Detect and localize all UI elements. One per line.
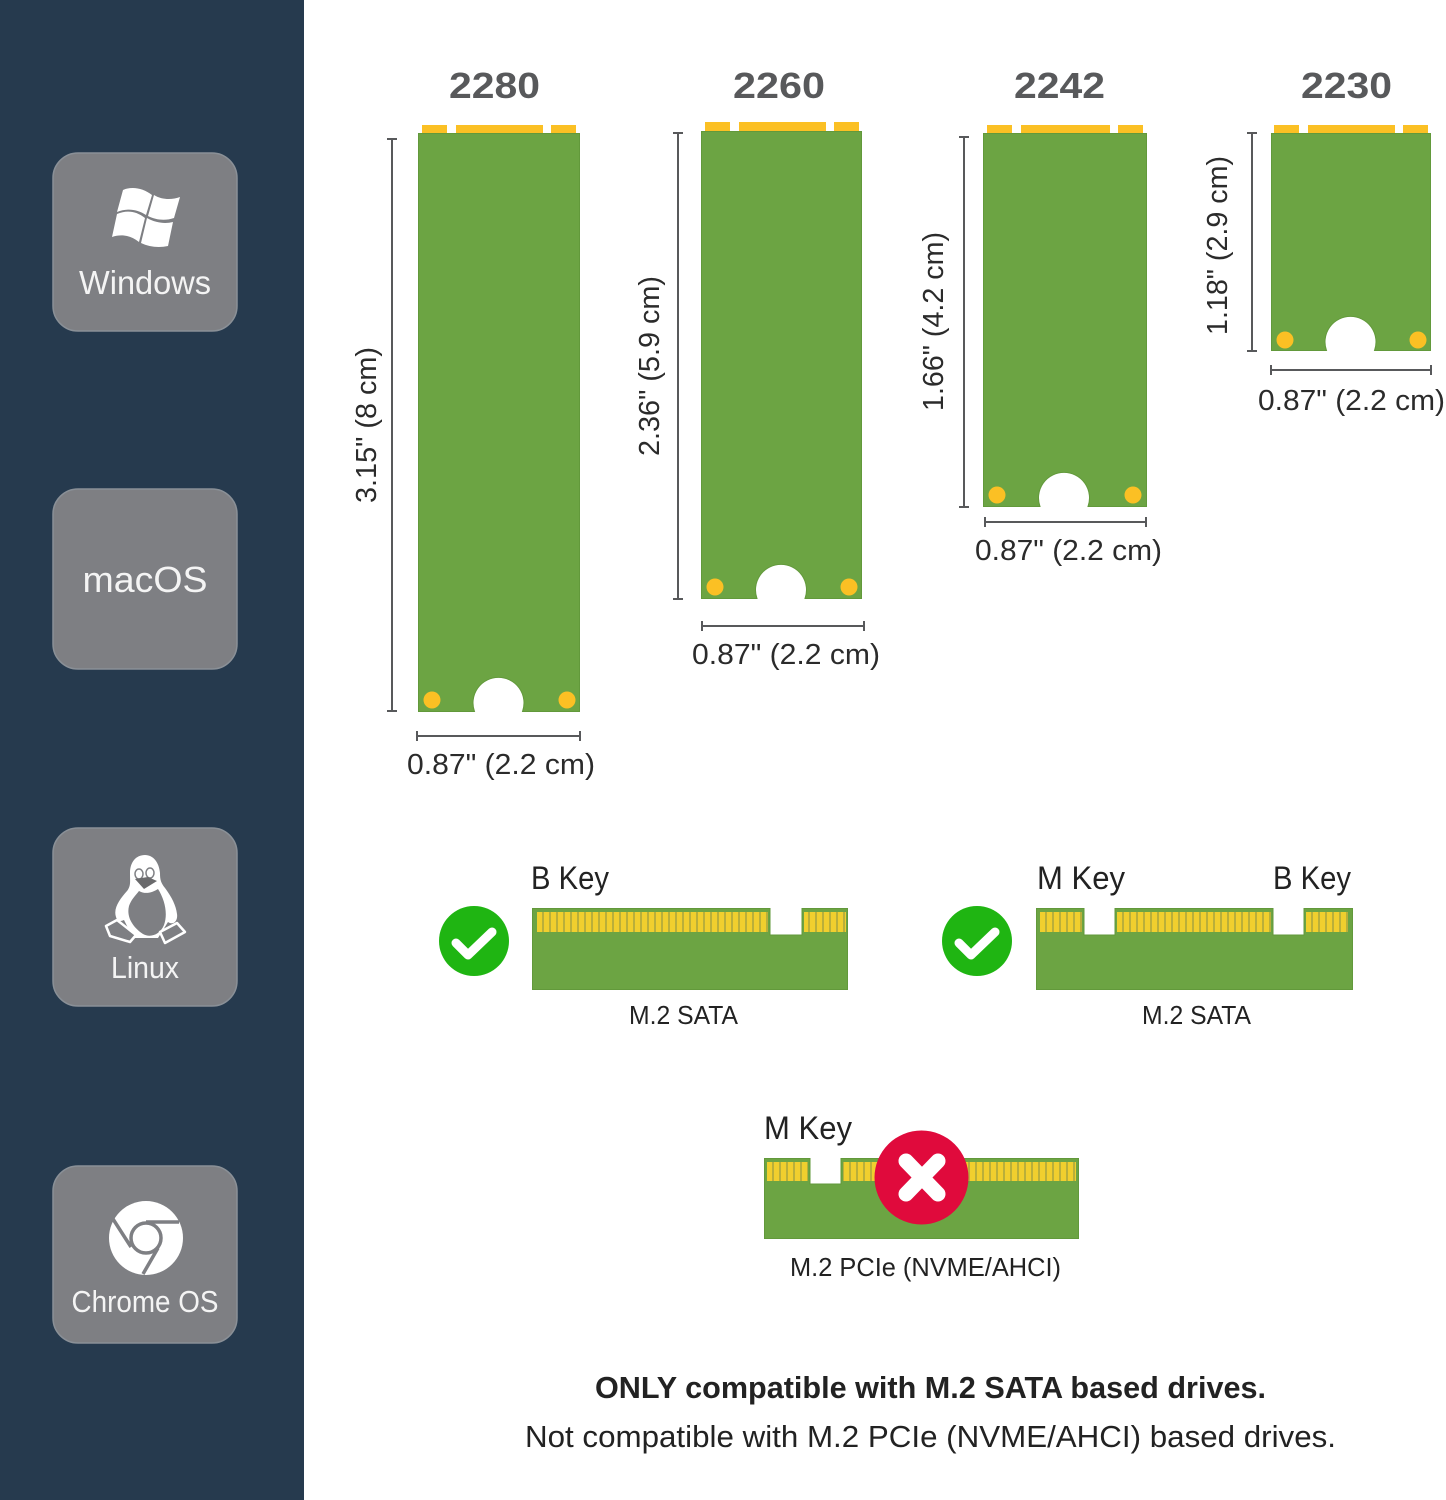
label: Windows: Windows	[79, 264, 211, 301]
label: macOS: macOS	[82, 559, 208, 600]
compatibility note	[525, 1370, 1336, 1454]
icon: Linux penguin	[106, 855, 185, 943]
width dimension 2230	[1271, 365, 1431, 375]
bold note: ONLY compatible with M.2 SATA based drives.	[595, 1370, 1266, 1405]
width dimension 2280	[417, 731, 580, 741]
label: B Key: B Key	[531, 860, 609, 896]
board 2230	[1272, 134, 1430, 350]
connector board	[764, 1158, 1078, 1238]
width label 2280: 0.87" (2.2 cm)	[407, 749, 595, 781]
height label 2242: 1.66" (4.2 cm)	[918, 232, 950, 411]
mounting holes 2260	[706, 578, 858, 596]
height dimension 2280	[387, 139, 397, 711]
board 2280	[418, 134, 580, 712]
module 2230	[1202, 65, 1445, 417]
connector board	[1036, 908, 1352, 990]
width label 2230: 0.87" (2.2 cm)	[1258, 385, 1445, 417]
macOS card	[53, 489, 237, 669]
height label 2230: 1.18" (2.9 cm)	[1202, 156, 1234, 335]
board 2242	[984, 134, 1146, 506]
height label 2280: 3.15" (8 cm)	[351, 347, 383, 503]
width dimension 2260	[702, 621, 864, 631]
sidebar panel	[0, 0, 304, 1500]
height dimension 2230	[1247, 133, 1257, 351]
icon: green check	[439, 906, 509, 976]
Chrome OS card	[53, 1166, 237, 1343]
icon: Windows logo	[112, 188, 180, 247]
M Key connector incompatible	[764, 1110, 1078, 1282]
board 2260	[702, 132, 862, 598]
connector board	[532, 908, 848, 990]
label: Linux: Linux	[111, 950, 179, 985]
icon: Chrome logo	[109, 1201, 183, 1275]
label: M Key: M Key	[1037, 860, 1125, 896]
caption: M.2 SATA: M.2 SATA	[1142, 1000, 1252, 1030]
caption: M.2 SATA: M.2 SATA	[629, 1000, 739, 1030]
label: M Key: M Key	[764, 1110, 852, 1146]
width label 2260: 0.87" (2.2 cm)	[692, 639, 880, 671]
heading 2242: 2242	[1014, 65, 1105, 106]
label: Chrome OS: Chrome OS	[72, 1284, 218, 1319]
module 2242	[918, 65, 1162, 567]
mounting holes 2280	[424, 692, 576, 708]
M Key and B Key connector	[942, 860, 1352, 1030]
regular note: Not compatible with M.2 PCIe (NVME/AHCI) based drives.	[525, 1419, 1336, 1454]
width dimension 2242	[985, 517, 1146, 527]
caption: M.2 PCIe: M.2 PCIe (NVME/AHCI)	[790, 1252, 1061, 1282]
heading 2260: 2260	[733, 65, 825, 106]
contacts 2242	[987, 125, 1143, 133]
mounting holes 2230	[1276, 332, 1426, 348]
label: B Key right: B Key	[1273, 860, 1351, 896]
contacts 2280	[422, 125, 576, 133]
contacts 2230	[1274, 125, 1428, 133]
Windows card	[53, 153, 237, 331]
module 2280	[351, 65, 595, 781]
icon: green check	[942, 906, 1012, 976]
heading 2230: 2230	[1301, 65, 1392, 106]
width label 2242: 0.87" (2.2 cm)	[975, 535, 1162, 567]
icon: red cross	[874, 1130, 968, 1224]
module 2260	[634, 65, 880, 671]
heading 2280: 2280	[449, 65, 540, 106]
B Key connector	[439, 860, 848, 1030]
height dimension 2260	[673, 133, 683, 599]
Linux card	[53, 828, 237, 1006]
mounting holes 2242	[988, 486, 1142, 504]
height label 2260: 2.36" (5.9 cm)	[634, 276, 666, 456]
height dimension 2242	[959, 137, 969, 507]
contacts 2260	[705, 122, 859, 131]
